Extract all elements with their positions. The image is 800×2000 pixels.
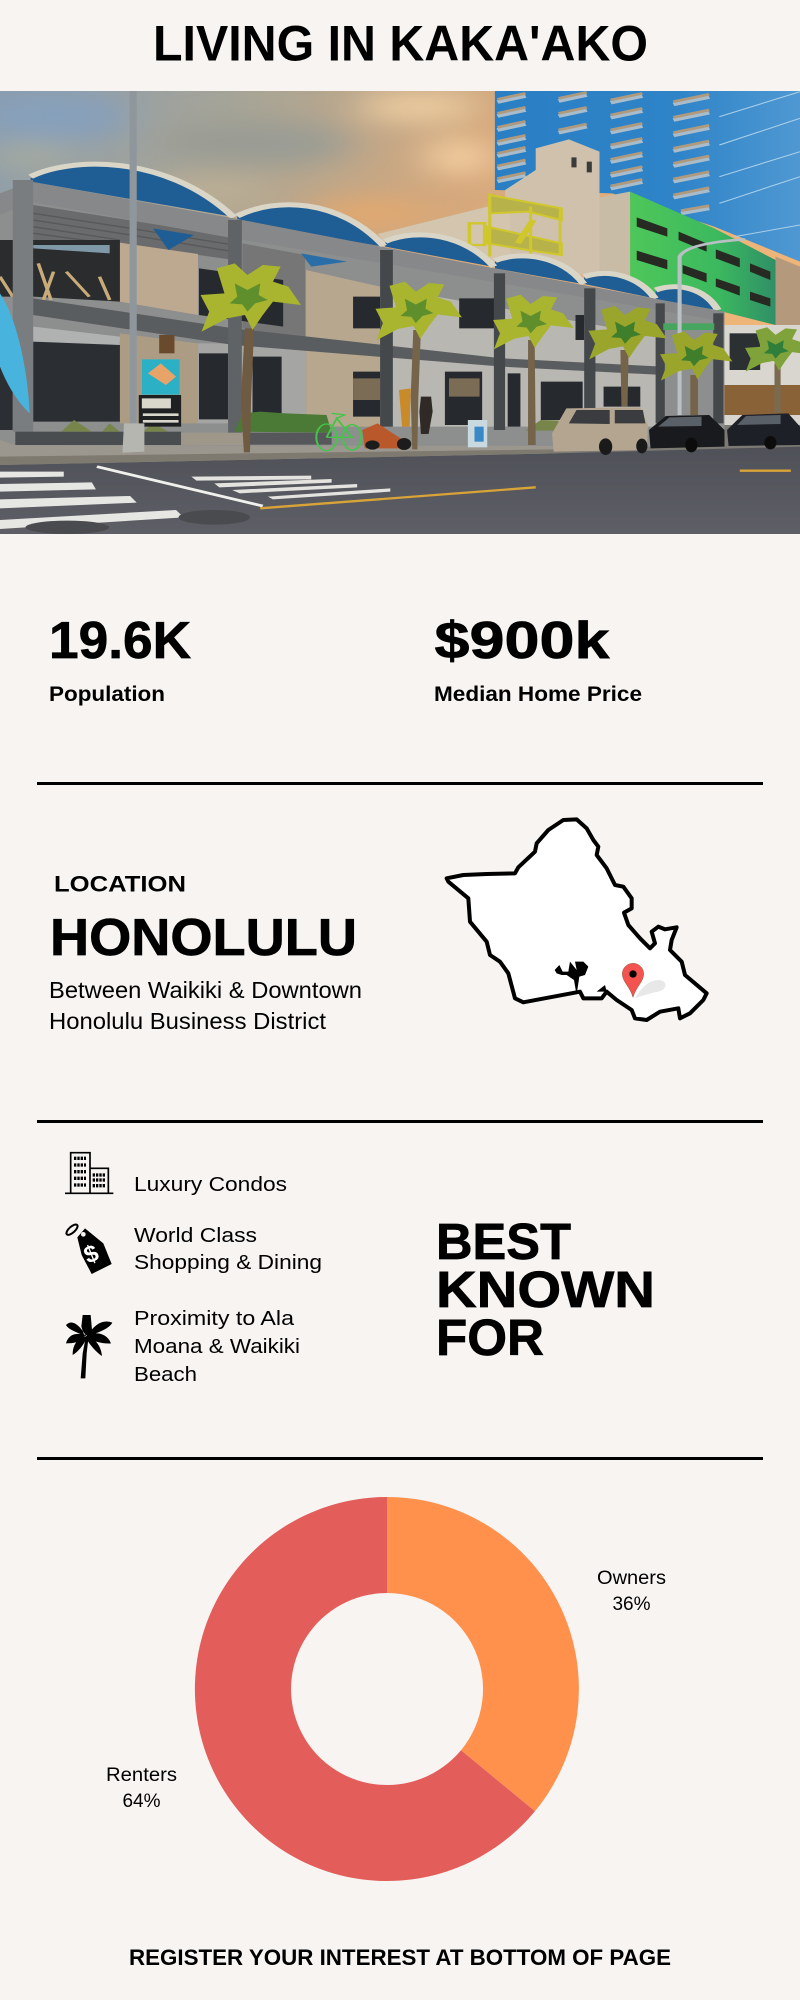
heading: best known for: KNOWN [436, 1261, 655, 1318]
sidewalk [0, 440, 556, 465]
donut chart: owners vs renters [195, 1497, 579, 1881]
parked cars [552, 407, 800, 455]
map of Oahu with location pin [447, 819, 707, 1020]
palm trees [201, 263, 800, 452]
sky [0, 91, 800, 424]
roof vaults [31, 164, 718, 310]
text: shopping and dining: Shopping & Dining [134, 1252, 322, 1274]
icon: price tag: $ [80, 1240, 103, 1270]
photo: Kaka'ako street view [0, 91, 800, 534]
stat: median home price [434, 612, 642, 706]
location heading and description: Between Waikiki & Downtown [49, 977, 362, 1003]
location heading and description [49, 872, 362, 1034]
stat: population: 19.6K [49, 612, 191, 670]
road [0, 447, 800, 534]
location heading and description: HONOLULU [50, 909, 357, 967]
text: shopping and dining [134, 1225, 322, 1274]
heading: best known for [436, 1213, 655, 1366]
footer call to action: REGISTER YOUR INTEREST AT BOTTOM OF PAGE [129, 1945, 671, 1970]
yellow fire stairs [469, 193, 561, 257]
heading: best known for: BEST [436, 1213, 571, 1270]
icon: palm tree [66, 1315, 112, 1378]
label: owners: Owners [597, 1568, 666, 1589]
light poles [122, 91, 745, 453]
text: proximity to beach: Beach [134, 1364, 197, 1386]
steel beams and columns [0, 180, 724, 433]
signs and banner [0, 293, 181, 427]
label: renters: 64% [122, 1791, 161, 1812]
icon: buildings [65, 1153, 113, 1193]
stat: median home price: $900k [434, 612, 610, 670]
location heading and description: LOCATION [54, 872, 186, 896]
heading: best known for: FOR [436, 1309, 544, 1366]
text: shopping and dining: World Class [134, 1225, 257, 1247]
label: renters [106, 1765, 177, 1812]
text: luxury condos: Luxury Condos [134, 1174, 287, 1196]
text: proximity to beach [134, 1308, 300, 1386]
right-hand low building [663, 323, 800, 425]
pedestrians, scooter, green bike [316, 388, 487, 451]
glass tower [495, 91, 800, 262]
title: LIVING IN KAKA'AKO [153, 16, 648, 72]
icon: price tag [65, 1223, 112, 1274]
text: proximity to beach: Moana & Waikiki [134, 1336, 300, 1358]
label: owners [597, 1568, 666, 1615]
stat: population: Population [49, 683, 165, 706]
label: renters: Renters [106, 1765, 177, 1786]
stat: median home price: Median Home Price [434, 683, 642, 706]
text: proximity to beach: Proximity to Ala [134, 1308, 295, 1330]
location heading and description: Honolulu Business District [49, 1008, 327, 1034]
label: owners: 36% [612, 1594, 651, 1615]
shopping centre facade [0, 193, 724, 447]
planters and shrubs [15, 412, 559, 445]
list: best known for [65, 1153, 322, 1386]
concrete stair tower and parking structure [378, 139, 800, 333]
stat: population [49, 612, 191, 706]
